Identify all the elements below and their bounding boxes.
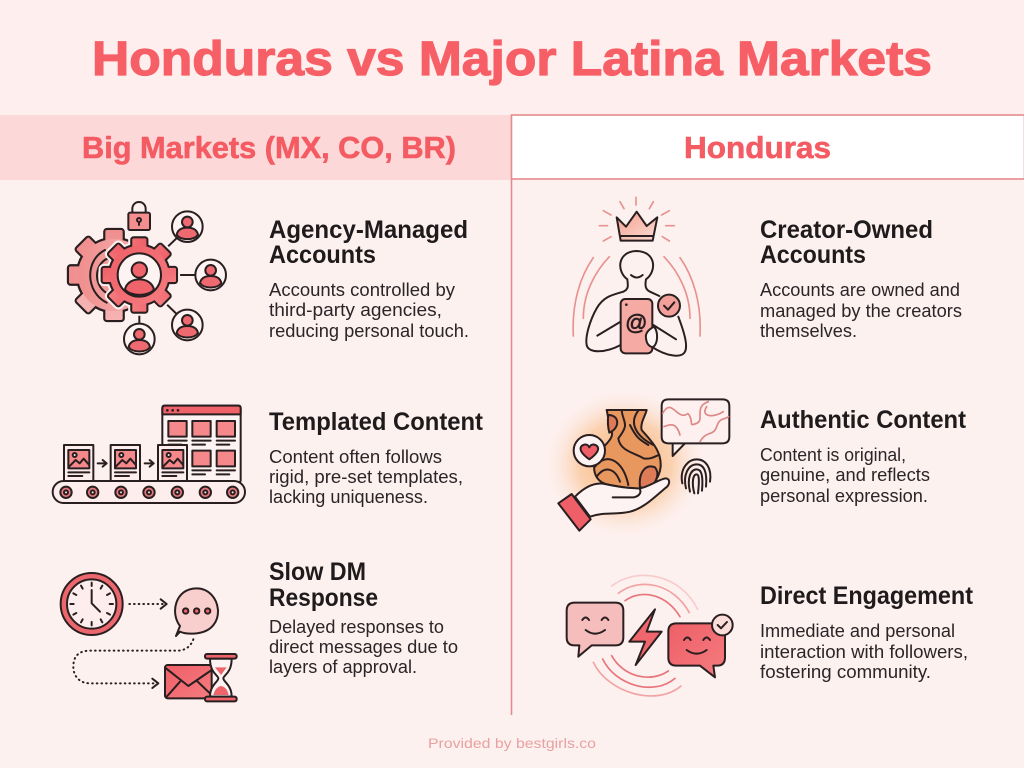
heading: Accounts [269, 241, 376, 269]
description [269, 617, 458, 677]
panel: right column header [512, 115, 1024, 179]
heading [269, 216, 468, 269]
panel: slow dm response [61, 558, 458, 701]
icon: handmade pot in hand with fingerprint [540, 385, 729, 542]
heading: Templated Content [269, 408, 484, 436]
description: Content often follows [269, 447, 442, 467]
description [760, 621, 968, 682]
icon: crowned creator holding phone [573, 197, 700, 356]
panel: templated content [53, 406, 484, 507]
panel: direct engagement [567, 575, 974, 696]
description: direct messages due to [269, 637, 458, 657]
footer credit: Provided by bestgirls.co [428, 735, 596, 751]
panel: authentic content [540, 385, 967, 542]
title: Honduras vs Major Latina Markets [92, 33, 932, 86]
icon: template conveyor belt [53, 406, 245, 503]
description: rigid, pre-set templates, [269, 467, 463, 487]
heading: Direct Engagement [760, 582, 974, 610]
panel: left column header [0, 115, 511, 180]
description: managed by the creators [760, 301, 962, 321]
description: themselves. [760, 321, 857, 341]
heading [269, 558, 378, 612]
icon: gears and managed users [69, 202, 226, 354]
panel: creator-owned accounts [573, 197, 962, 356]
icon: chat bubbles with lightning bolt [567, 575, 733, 696]
description: Accounts controlled by [269, 280, 455, 300]
heading [760, 216, 933, 269]
title band [0, 0, 1024, 115]
heading: Agency-Managed [269, 216, 468, 244]
heading: Creator-Owned [760, 216, 933, 244]
description: lacking uniqueness. [269, 487, 428, 507]
panel: agency-managed accounts [69, 202, 469, 354]
description: layers of approval. [269, 657, 417, 677]
description [760, 445, 930, 506]
description: interaction with followers, [760, 642, 968, 662]
heading: Accounts [760, 241, 866, 269]
description: Delayed responses to [269, 617, 444, 637]
description [269, 447, 463, 507]
description: reducing personal touch. [269, 321, 469, 341]
icon: clock, message and hourglass [61, 573, 237, 701]
description: genuine, and reflects [760, 465, 930, 485]
description: Accounts are owned and [760, 280, 960, 300]
description: Immediate and personal [760, 621, 955, 641]
description: third-party agencies, [269, 300, 442, 320]
heading: Slow DM [269, 558, 366, 586]
description [269, 280, 469, 341]
heading: big markets: Big Markets (MX, CO, BR) [82, 130, 456, 165]
icon: crowned creator holding phone: @ [625, 310, 647, 335]
heading: Response [269, 584, 378, 612]
description: Content is original, [760, 445, 906, 465]
description: personal expression. [760, 486, 928, 506]
description: fostering community. [760, 662, 931, 682]
description [760, 280, 962, 341]
heading: Authentic Content [760, 406, 967, 434]
heading: honduras: Honduras [684, 130, 831, 165]
